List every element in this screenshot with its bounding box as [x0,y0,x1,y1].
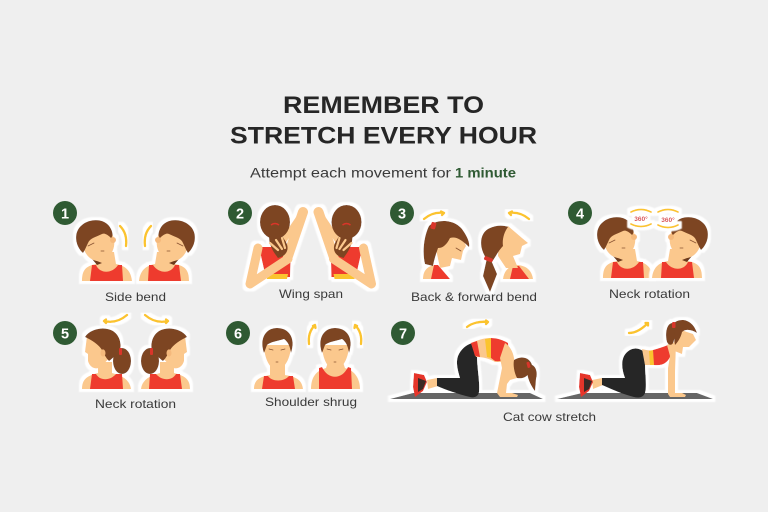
rotation icon left: 360° [634,215,648,223]
figure: shoulders down [254,328,303,389]
rotation icon right: 360° [661,216,675,224]
arrow right [145,226,151,246]
label: Neck rotation [95,397,176,411]
label: Neck rotation [609,287,690,301]
arrow right [354,325,361,344]
title: STRETCH EVERY HOUR [230,122,537,150]
panel: 5 neck rotation [53,315,190,411]
figure: forward bend [423,221,469,279]
subtitle: 1 minute [455,164,516,180]
arrow [424,212,444,219]
panel: 4 neck rotation [568,201,708,301]
figure: wing span right [318,205,372,284]
figure: side bend right [139,220,195,281]
figure: side bend left [76,220,132,281]
subtitle: Attempt each movement for [250,164,451,180]
arrow left [309,325,316,344]
figure: cow pose [557,320,713,399]
figure: profile left [82,329,131,389]
figure: profile right [141,329,190,389]
panel: 7 cat cow stretch [390,320,713,424]
arrow [467,320,488,327]
badge 2 [228,201,252,225]
badge 5: 5 [61,326,69,342]
label: Shoulder shrug [265,395,357,409]
arrow right [145,315,168,323]
label: Wing span [279,287,343,301]
badge 1 [53,201,77,225]
panel: 3 back and forward bend [390,201,537,304]
badge 4: 4 [576,206,584,222]
label: Cat cow stretch [503,410,596,424]
arrow [509,212,529,219]
panel: 2 wing span [228,201,372,301]
badge 6: 6 [234,326,242,342]
figure: neck rotation left [597,217,653,278]
figure: cat pose [390,338,543,399]
badge 3 [390,201,414,225]
title: REMEMBER TO [283,92,484,119]
figure: neck rotation right [652,217,708,278]
figure: back bend [481,226,533,292]
badge 2: 2 [236,206,244,222]
label: Back & forward bend [411,290,537,304]
arrow [629,323,648,333]
panel: 6 shoulder shrug [226,321,361,409]
label: Side bend [105,290,166,304]
figure: shoulders raised [311,328,360,389]
panel: 1 side bend [53,201,195,304]
badge 7: 7 [399,326,407,342]
badge 7 [391,321,415,345]
arrow left [104,315,127,323]
badge 1: 1 [61,206,69,222]
figure: wing span left [250,205,303,284]
badge 3: 3 [398,206,406,222]
arrow left [120,226,126,246]
